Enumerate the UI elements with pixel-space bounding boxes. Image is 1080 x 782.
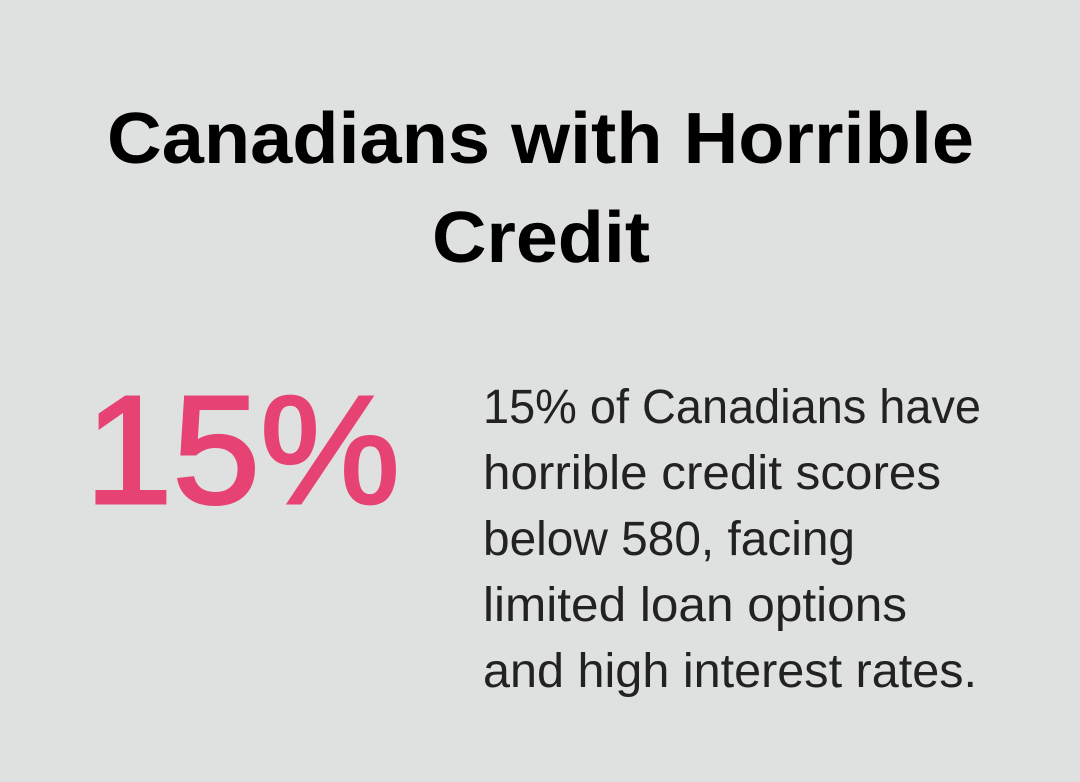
description text: below 580, facing bbox=[483, 513, 855, 566]
description text: and high interest rates. bbox=[483, 645, 977, 698]
big statistic: 15%: 15% bbox=[85, 364, 400, 536]
description text: horrible credit scores bbox=[483, 447, 941, 500]
title: Canadians with Horrible bbox=[107, 99, 974, 179]
title: Credit bbox=[432, 198, 650, 278]
description text bbox=[483, 381, 981, 698]
description text: 15% of Canadians have bbox=[483, 381, 981, 434]
description text: limited loan options bbox=[483, 579, 907, 632]
title bbox=[107, 99, 974, 278]
